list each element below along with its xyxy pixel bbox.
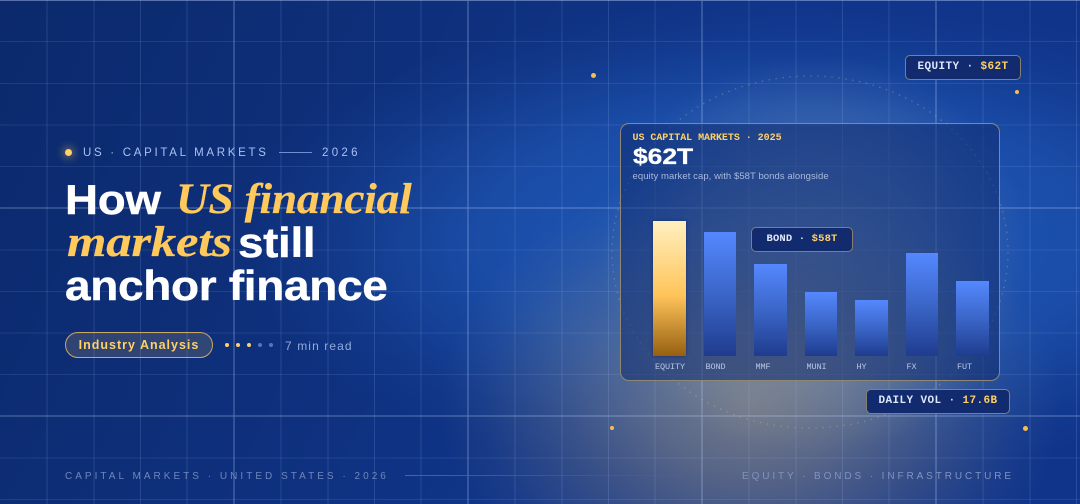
bar chart: HY	[856, 362, 867, 372]
eyebrow	[58, 142, 361, 162]
progress dots	[225, 343, 273, 347]
icon: glowing dot	[65, 149, 72, 156]
bar chart: FUT	[957, 362, 972, 372]
card subtitle: equity market cap, with $58T bonds alongside	[632, 171, 829, 182]
bars	[652, 220, 989, 357]
bar chart: FX	[906, 362, 917, 372]
title: How	[65, 176, 161, 223]
eyebrow year: 2026	[322, 147, 361, 159]
callout: bond	[751, 227, 853, 252]
pill: Industry Analysis	[65, 332, 213, 358]
card big number: $62T	[632, 144, 693, 169]
pill: Industry Analysis: Industry Analysis	[79, 338, 199, 352]
callout: equity: EQUITY · $62T	[917, 61, 1009, 73]
title: markets	[67, 219, 232, 266]
footer right: EQUITY · BONDS · INFRASTRUCTURE	[742, 471, 1014, 482]
callout: daily volume	[866, 389, 1010, 414]
read time: 7 min read	[285, 339, 353, 353]
title: anchor finance	[65, 262, 388, 309]
bar chart	[652, 220, 989, 372]
bar chart: MUNI	[806, 362, 827, 372]
bar chart: BOND	[706, 362, 726, 372]
footer left: CAPITAL MARKETS · UNITED STATES · 2026	[65, 471, 389, 482]
title	[65, 176, 412, 309]
callout: equity	[905, 55, 1021, 80]
footer rule	[405, 475, 685, 476]
callout: bond: BOND · $58T	[766, 233, 837, 245]
title: still	[238, 219, 315, 266]
bar labels: EQUITY	[655, 362, 685, 372]
title: US financial	[176, 176, 411, 223]
callout: daily volume: DAILY VOL · 17.6B	[878, 395, 998, 407]
panel: chart card	[620, 123, 1000, 381]
eyebrow text: US · CAPITAL MARKETS	[83, 147, 269, 159]
card eyebrow: US CAPITAL MARKETS · 2025	[632, 133, 782, 144]
bar chart: MMF	[756, 362, 771, 372]
